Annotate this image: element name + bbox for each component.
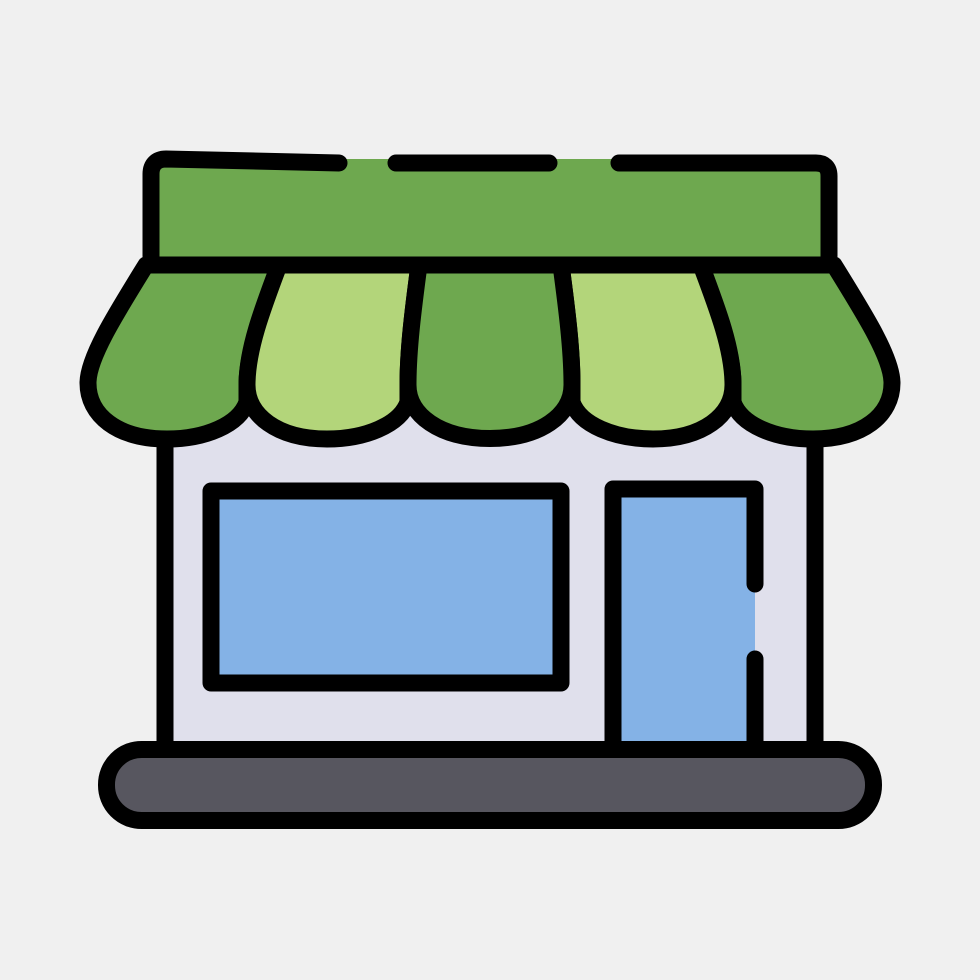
awning stripe 5: [701, 265, 892, 439]
pavement base: [106, 750, 874, 820]
awning stripe 3: [408, 265, 572, 438]
roof sign band: [151, 159, 829, 265]
awning stripes: [88, 265, 892, 439]
window: [211, 491, 561, 683]
awning stripe 4: [561, 265, 733, 439]
awning stripe 1: [88, 265, 279, 439]
building wall: [165, 400, 815, 748]
awning stripe 2: [247, 265, 419, 439]
door: [613, 489, 755, 748]
